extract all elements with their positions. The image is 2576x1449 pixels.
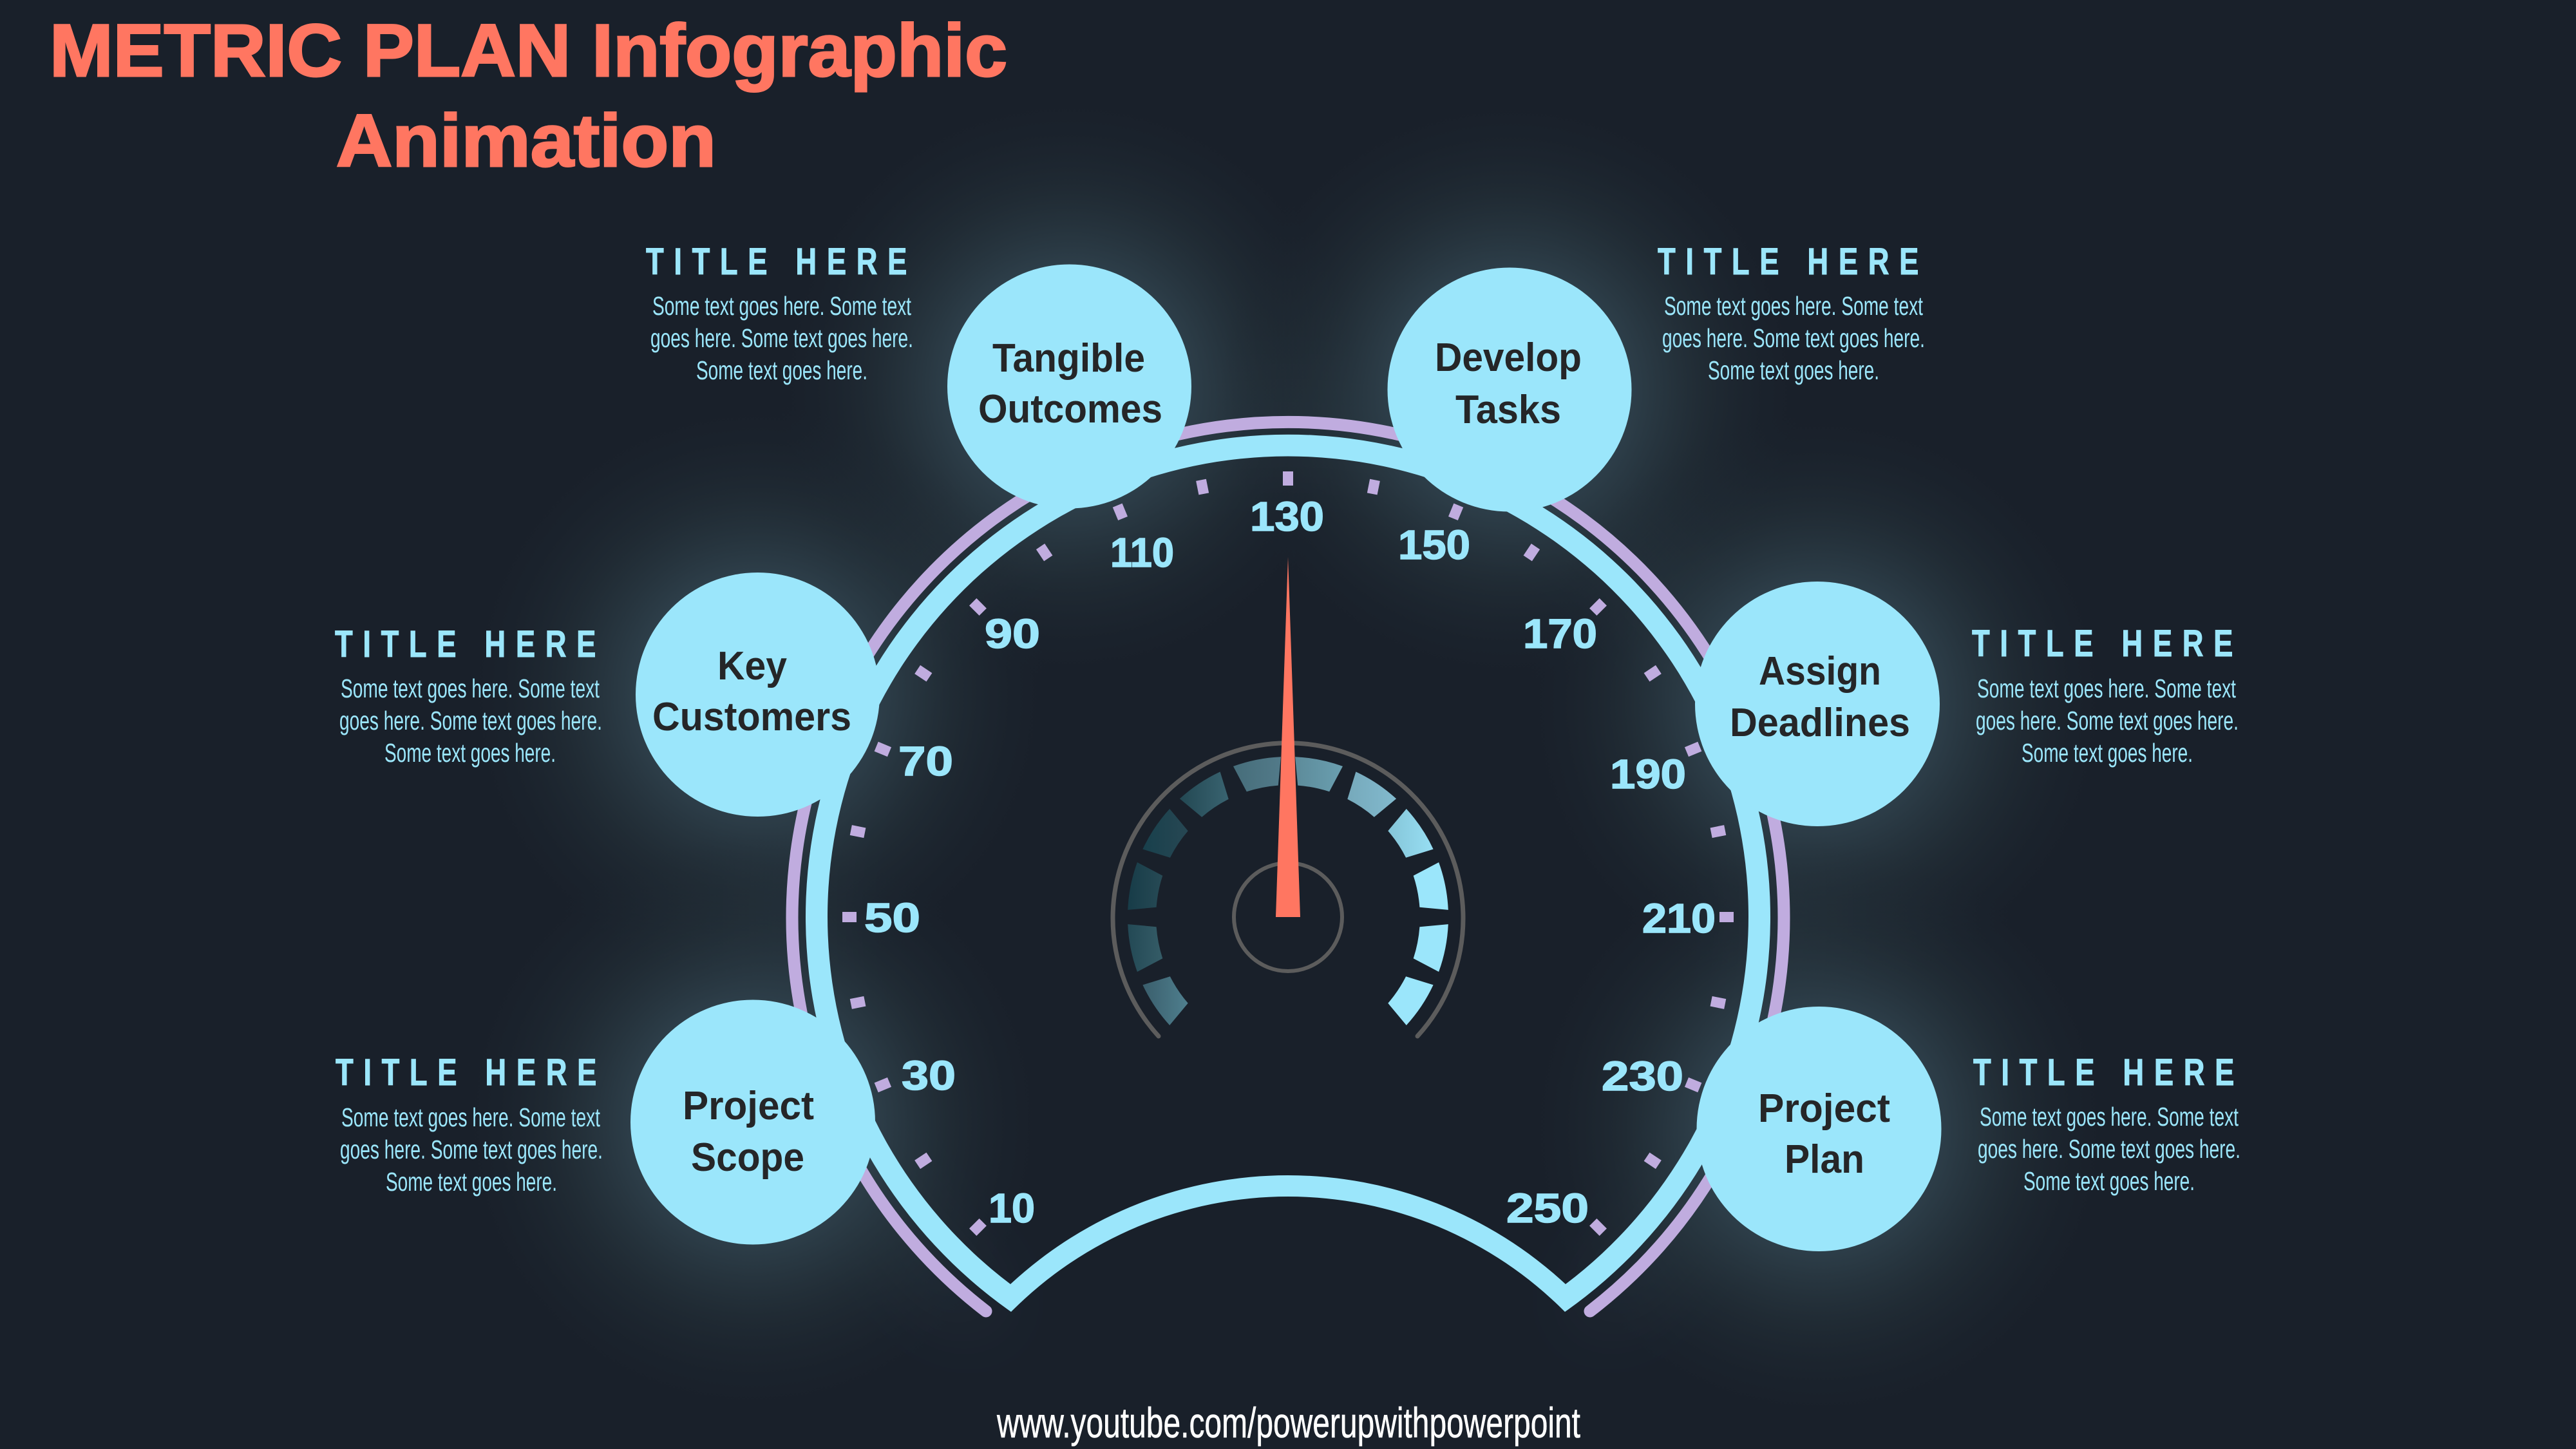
gauge outer gray arc xyxy=(1113,743,1463,1036)
text block: middle left xyxy=(335,623,606,768)
text block: top left: Some text goes here. Some text xyxy=(652,291,911,321)
node: Project Scope: Scope xyxy=(691,1135,804,1180)
dial scale numbers: 50 xyxy=(864,895,920,941)
node: Key Customers xyxy=(636,573,880,817)
footer url: www.youtube.com/powerupwithpowerpoint xyxy=(996,1399,1580,1446)
text block: middle right: goes here. Some text goes here. xyxy=(1976,706,2239,735)
dial scale numbers: 250 xyxy=(1506,1185,1589,1231)
text block: bottom right: TITLE HERE xyxy=(1973,1052,2244,1094)
hub ring xyxy=(1234,863,1342,971)
dial scale numbers: 90 xyxy=(985,611,1040,657)
text block: top right: Some text goes here. Some text xyxy=(1664,291,1923,321)
text block: bottom right: goes here. Some text goes here. xyxy=(1978,1134,2240,1164)
dial scale numbers: 70 xyxy=(898,738,953,784)
text block: middle left: Some text goes here. xyxy=(384,738,556,768)
dial scale numbers: 190 xyxy=(1610,751,1686,797)
text block: bottom left: TITLE HERE xyxy=(336,1052,607,1094)
text block: top left xyxy=(646,241,917,385)
node: Project Plan xyxy=(1696,1007,1941,1251)
text block: bottom left: goes here. Some text goes here. xyxy=(340,1135,603,1164)
text block: middle left: goes here. Some text goes here. xyxy=(339,706,602,735)
cyan dial ring xyxy=(806,435,1770,1312)
text block: top right: TITLE HERE xyxy=(1658,241,1929,283)
node: Develop Tasks xyxy=(1387,268,1632,511)
node: Project Plan: Project xyxy=(1758,1086,1890,1131)
text block: middle left: TITLE HERE xyxy=(335,623,606,665)
text block: middle right: Some text goes here. Some text xyxy=(1977,674,2236,703)
node: Project Plan: Plan xyxy=(1785,1137,1864,1182)
text block: top left: Some text goes here. xyxy=(696,355,867,385)
text block: top left: goes here. Some text goes here. xyxy=(650,323,913,353)
text block: top right: goes here. Some text goes here. xyxy=(1662,323,1925,353)
node: Develop Tasks: Tasks xyxy=(1455,388,1561,432)
dial scale numbers: 230 xyxy=(1602,1053,1683,1099)
text block: bottom right xyxy=(1973,1052,2244,1196)
gauge segments xyxy=(1128,757,1448,1025)
dial tick marks xyxy=(842,471,1734,1236)
inner gauge xyxy=(1113,557,1463,1036)
node: Project Scope xyxy=(630,999,875,1244)
dial scale numbers: 210 xyxy=(1642,895,1716,942)
dial scale numbers: 150 xyxy=(1398,522,1470,568)
text block: middle right: Some text goes here. xyxy=(2022,738,2193,768)
title: METRIC PLAN Infographic xyxy=(50,10,1007,92)
text block: bottom left xyxy=(336,1052,607,1197)
needle xyxy=(1276,557,1300,917)
glow behind dial and circles xyxy=(463,97,2108,1419)
title xyxy=(50,10,1007,182)
dial scale numbers: 30 xyxy=(902,1052,956,1099)
text block: middle left: Some text goes here. Some text xyxy=(341,674,600,703)
node: Project Scope: Project xyxy=(683,1084,814,1128)
node: Assign Deadlines: Deadlines xyxy=(1730,701,1910,745)
dial scale numbers: 10 xyxy=(989,1185,1035,1231)
text block: middle right: TITLE HERE xyxy=(1972,623,2243,665)
text block: bottom left: Some text goes here. Some text xyxy=(341,1103,600,1132)
node: Key Customers: Customers xyxy=(652,695,851,739)
node: Assign Deadlines xyxy=(1695,582,1940,826)
dial scale numbers: 170 xyxy=(1523,611,1597,657)
text block: top right: Some text goes here. xyxy=(1708,355,1879,385)
node: Develop Tasks: Develop xyxy=(1435,336,1582,380)
text block: top left: TITLE HERE xyxy=(646,241,917,283)
dial scale numbers xyxy=(864,493,1716,1231)
dial scale numbers: 110 xyxy=(1110,529,1174,576)
node: Tangible Outcomes: Outcomes xyxy=(978,387,1162,431)
dial scale numbers: 130 xyxy=(1250,493,1324,540)
text block: bottom right: Some text goes here. Some text xyxy=(1980,1102,2239,1132)
node: Assign Deadlines: Assign xyxy=(1759,649,1881,694)
node: Tangible Outcomes xyxy=(947,264,1191,509)
node: Tangible Outcomes: Tangible xyxy=(992,336,1145,381)
text block: bottom right: Some text goes here. xyxy=(2023,1166,2195,1196)
text block: bottom left: Some text goes here. xyxy=(386,1167,557,1197)
text block: top right xyxy=(1658,241,1929,385)
title: Animation xyxy=(336,100,716,182)
text block: middle right xyxy=(1972,623,2243,768)
outer purple arc xyxy=(792,422,1784,1311)
node: Key Customers: Key xyxy=(717,644,787,688)
